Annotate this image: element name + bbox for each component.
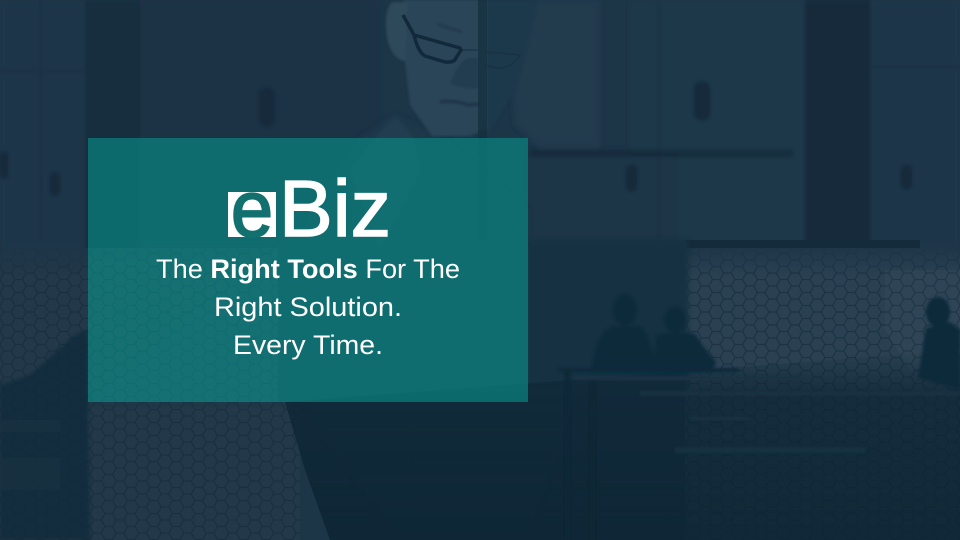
tagline xyxy=(156,254,460,360)
hanging lamps xyxy=(0,82,912,196)
lower floor shadow xyxy=(285,350,960,540)
man: glasses xyxy=(403,15,520,68)
window walls and pillars xyxy=(0,0,960,300)
tagline: Every Time. xyxy=(233,330,383,360)
logo: eBiz xyxy=(228,164,391,253)
hexagon wall right xyxy=(685,240,960,540)
seated silhouettes xyxy=(591,294,960,390)
tagline: The Right Tools For The xyxy=(156,254,460,284)
panel hexagon texture xyxy=(88,248,278,402)
logo: white square with e: e xyxy=(231,164,273,253)
hexagon wall left xyxy=(0,248,300,540)
window pillar across face xyxy=(478,0,487,240)
tagline: Right Solution. xyxy=(214,292,402,322)
logo: Biz wordmark: Biz xyxy=(279,164,391,253)
man: shirt and torso xyxy=(88,0,688,540)
table and benches xyxy=(558,368,960,540)
panel: teal brand box xyxy=(88,138,528,402)
man: face xyxy=(386,0,535,136)
